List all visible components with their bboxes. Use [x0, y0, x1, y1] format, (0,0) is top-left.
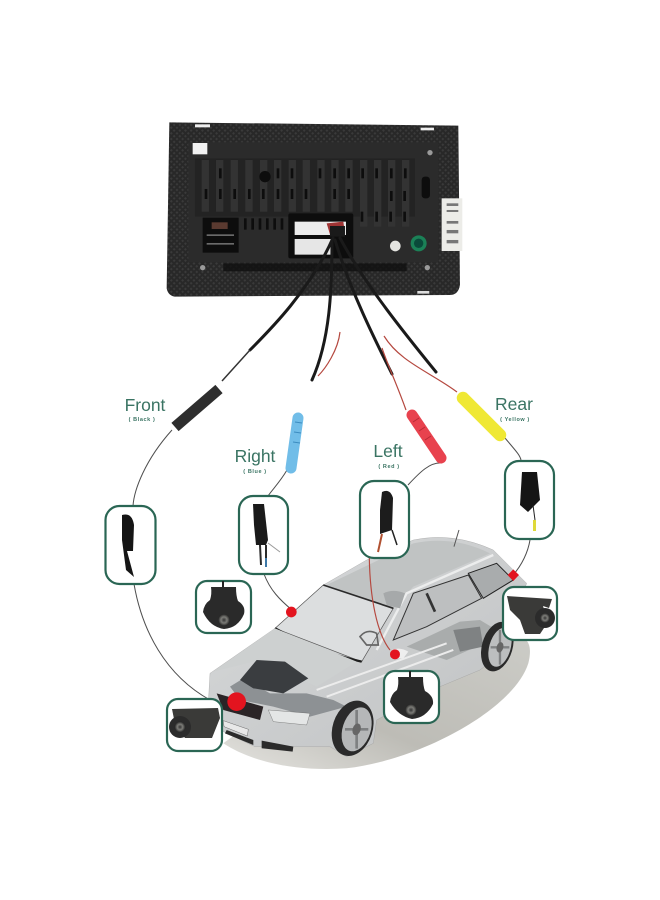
cable pack inset: left [360, 481, 409, 558]
thin cables to cameras [133, 430, 530, 700]
car shadow [223, 633, 530, 769]
label: Rear: ( Yellow ) [500, 417, 530, 423]
roof highlight [327, 541, 490, 608]
red signal wires [318, 332, 457, 410]
car illustration [208, 530, 530, 769]
engine cover [240, 660, 308, 693]
windshield lower edge [275, 628, 362, 662]
connector: left red [412, 415, 441, 458]
windshield upper edge [323, 585, 393, 608]
connector: rear yellow [463, 398, 500, 435]
head unit rear panel [167, 122, 462, 297]
antenna [454, 530, 459, 547]
label: Right: Right [235, 446, 276, 466]
label: Front: ( Black ) [129, 417, 155, 423]
cable pack inset: rear [505, 461, 554, 539]
camera inset: front bracket [167, 699, 222, 751]
label: Rear: Rear [495, 394, 533, 414]
side windows [393, 575, 482, 640]
grille [217, 693, 263, 720]
mirror [392, 649, 408, 658]
connector: right blue [291, 418, 302, 468]
red cable through car roof [369, 558, 390, 650]
engine bay [230, 678, 347, 717]
label: Left [373, 441, 403, 470]
lower air intakes [225, 730, 293, 752]
mounting points [227, 569, 519, 711]
camera inset: left dome [384, 671, 439, 723]
cable pack inset: right [239, 496, 288, 574]
label: Left: Left [373, 441, 403, 461]
windshield [275, 585, 393, 662]
thin lead to front connector [222, 350, 250, 381]
camera inset: right dome [196, 581, 251, 633]
number plate [223, 721, 248, 736]
headlight [268, 710, 310, 725]
label: Right: ( Blue ) [243, 469, 267, 475]
chassis mechanicals [407, 620, 497, 660]
hood [213, 628, 357, 687]
label: Front: Front [125, 395, 166, 415]
label: Right [235, 446, 276, 475]
connector: front black [175, 389, 219, 427]
label: Rear [495, 394, 533, 423]
cable pack inset: front [106, 506, 156, 584]
seat and interior [383, 591, 405, 608]
camera inset: rear bracket [503, 587, 557, 640]
label: Left: ( Red ) [378, 464, 400, 470]
front wheel [325, 695, 380, 761]
car body [208, 537, 527, 757]
harness cables from head unit [250, 238, 436, 380]
rear wheel [476, 618, 519, 675]
